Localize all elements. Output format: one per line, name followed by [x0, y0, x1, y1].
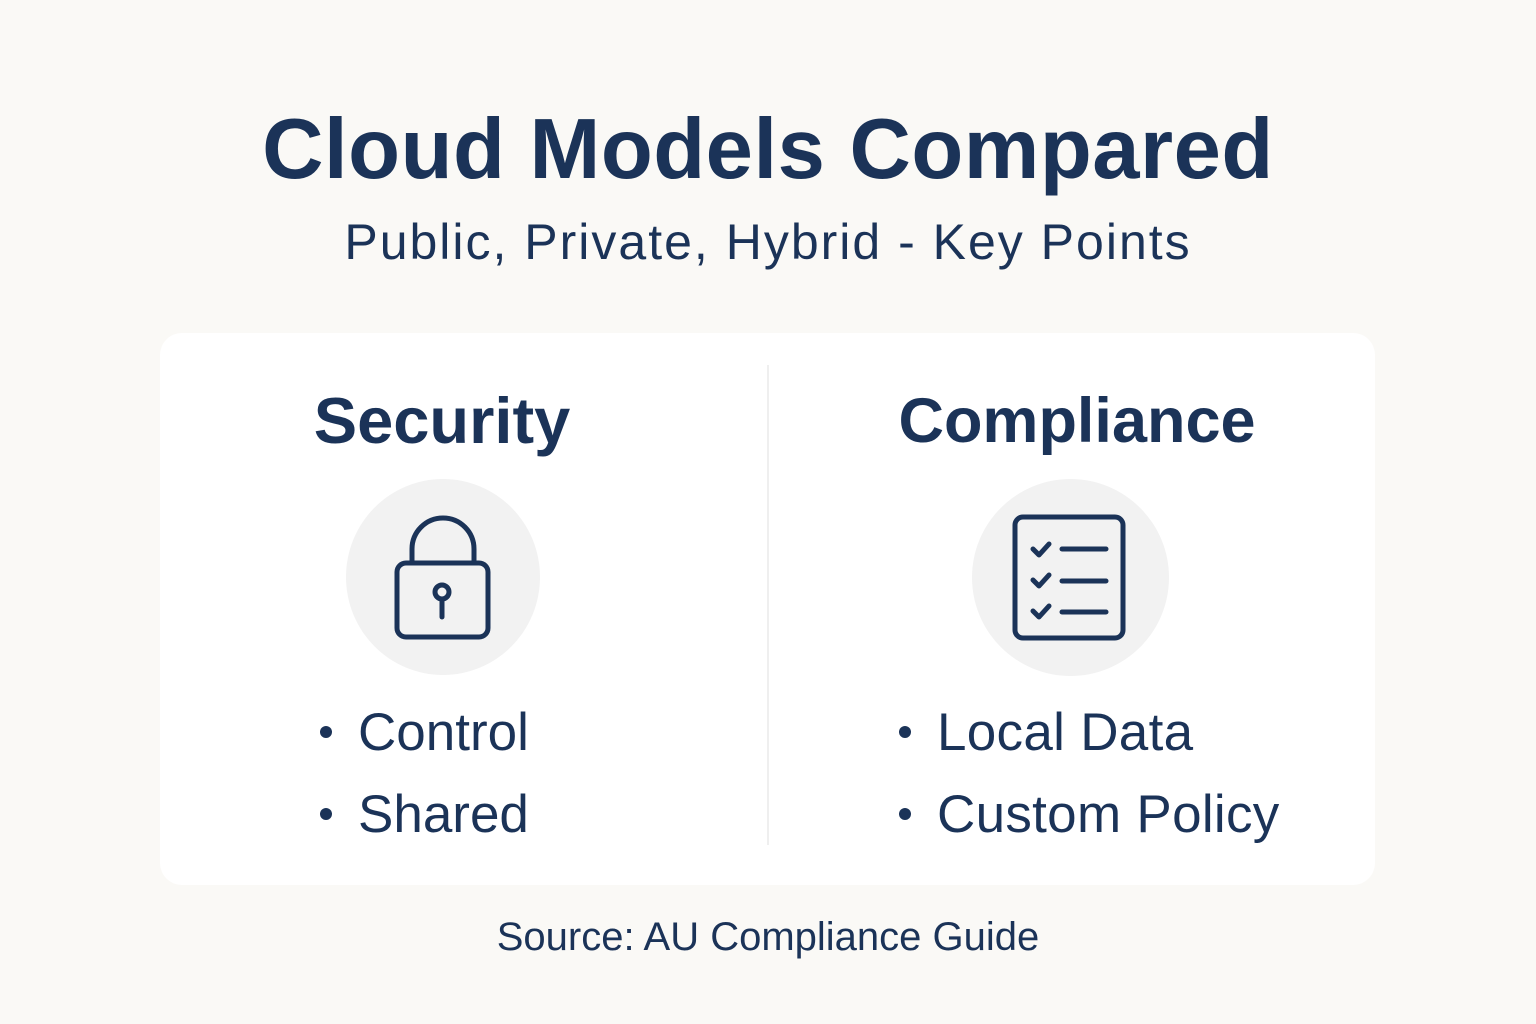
icon: lock [346, 479, 540, 675]
bullets: security: Control [358, 703, 529, 762]
bullets: security [320, 703, 529, 844]
title: Cloud Models Compared [262, 102, 1274, 197]
heading: Security: Security [314, 384, 570, 457]
bullets: compliance: Local Data [937, 703, 1193, 762]
bullets: security: Shared [358, 785, 529, 844]
bullets: compliance: Custom Policy [937, 785, 1280, 844]
icon: checklist [972, 479, 1169, 676]
heading: Compliance: Compliance [898, 386, 1256, 456]
subtitle: Public, Private, Hybrid - Key Points [344, 214, 1192, 270]
source note: Source: AU Compliance Guide [497, 915, 1039, 959]
panel: comparison card [160, 333, 1375, 885]
bullets: compliance [899, 703, 1280, 844]
